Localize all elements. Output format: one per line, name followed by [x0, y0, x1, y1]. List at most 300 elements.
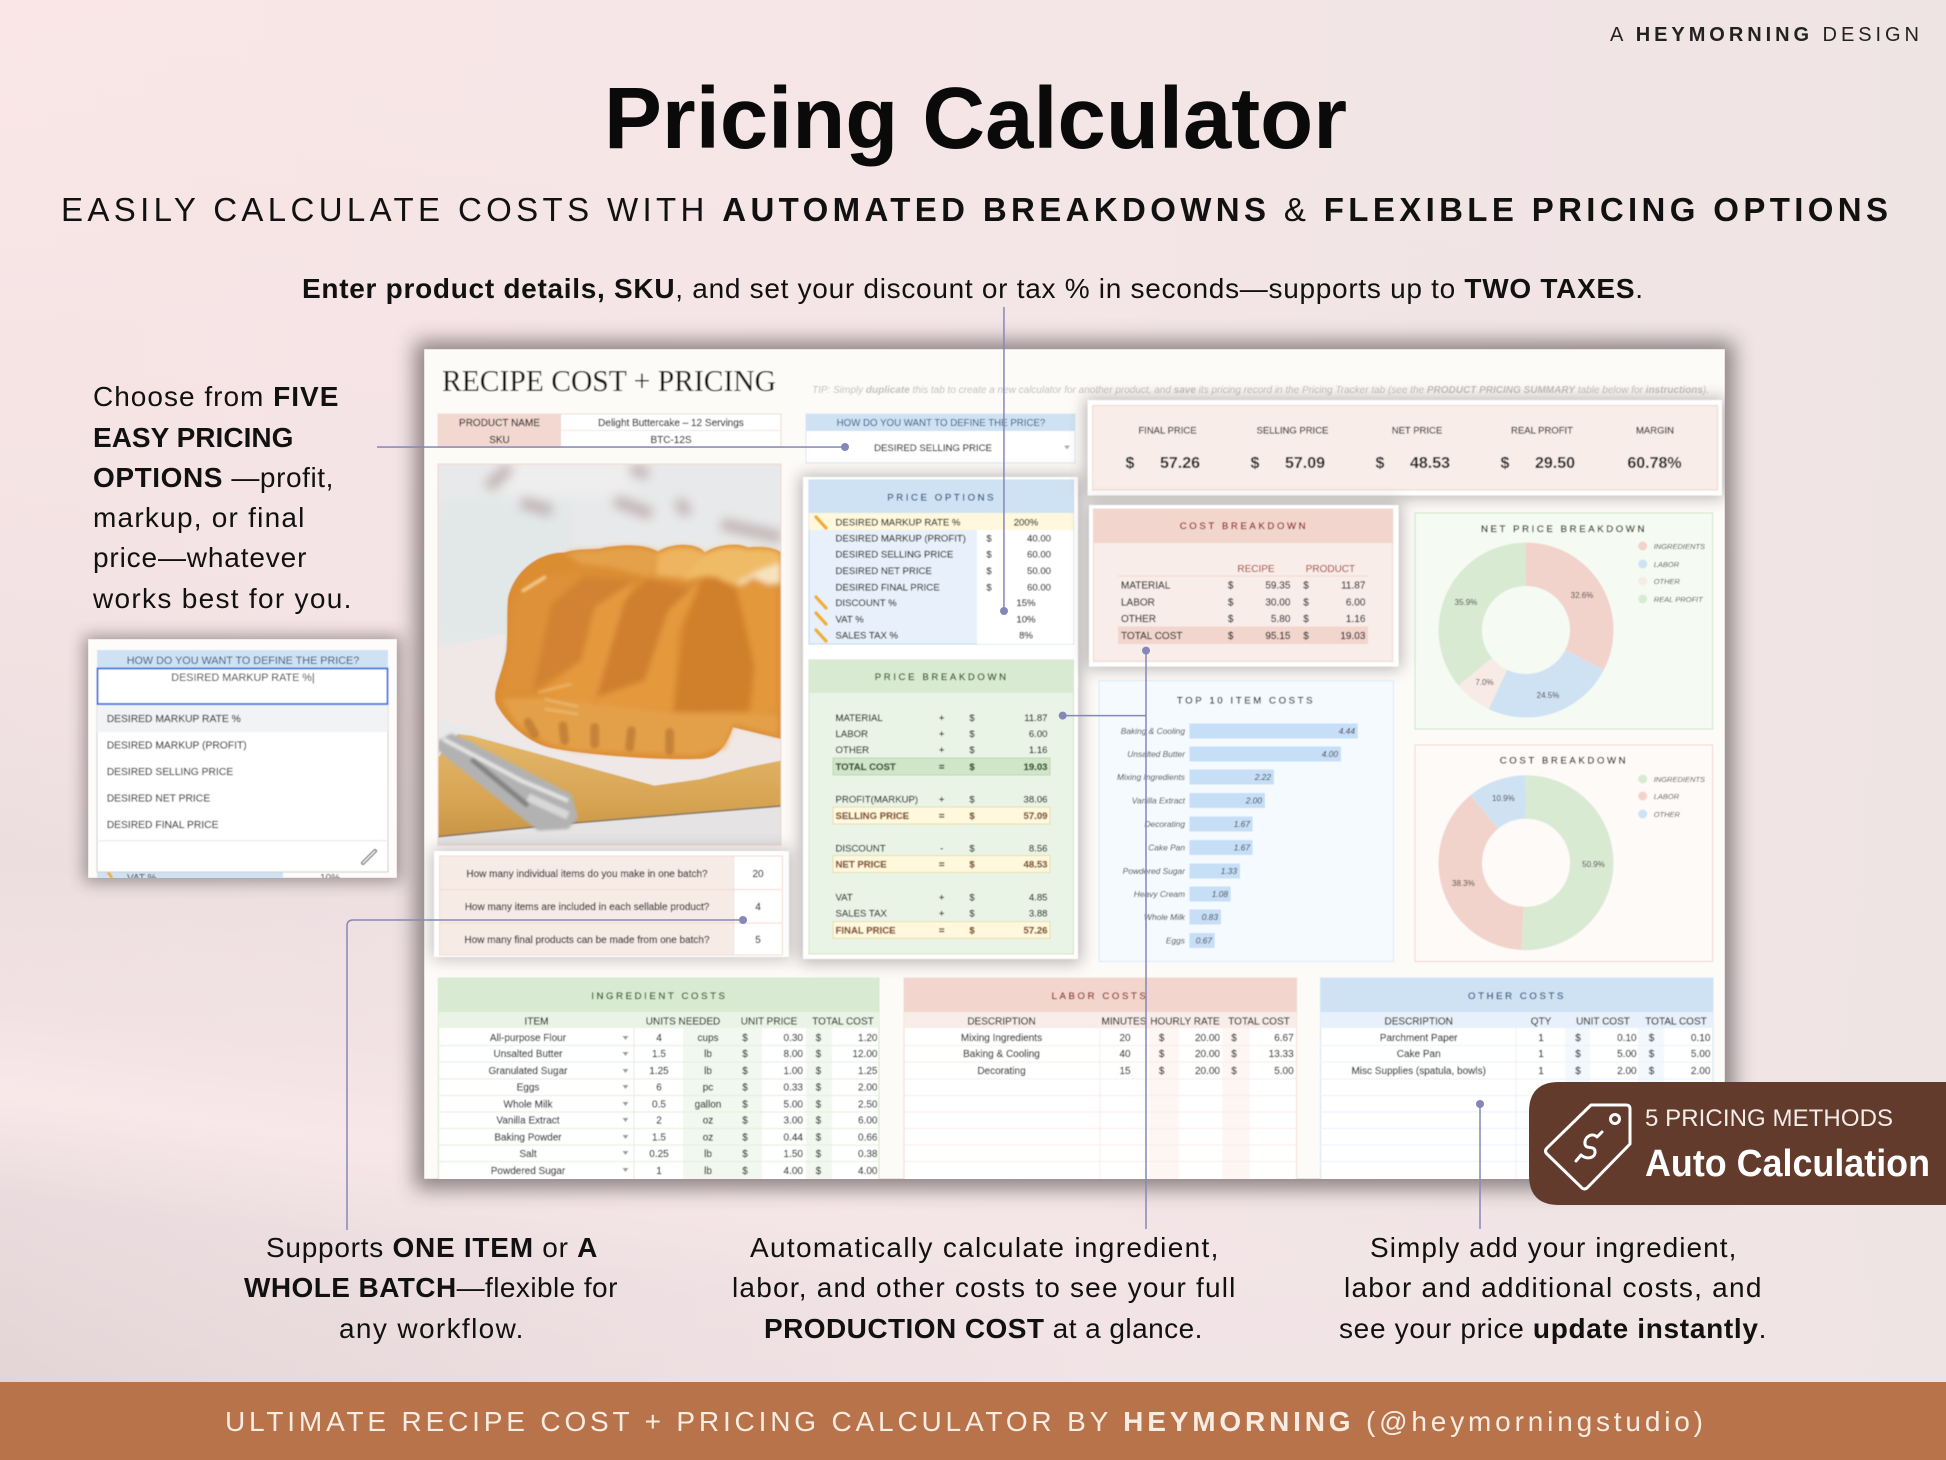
- panel: cost breakdown table: LABOR: [1121, 598, 1155, 608]
- panel: ingredient costs: lb: [704, 1049, 712, 1060]
- panel: price summary strip: [1088, 400, 1722, 496]
- legend: cost: INGREDIENTS: [1654, 775, 1705, 784]
- panel: other costs: $: [1649, 1049, 1655, 1060]
- panel: price breakdown: 1.16: [1029, 745, 1048, 756]
- panel: cost donut: 10.9%: [1492, 794, 1515, 803]
- panel: ingredient costs: 1.25: [858, 1066, 878, 1077]
- panel: price summary strip: SELLING PRICE: [1257, 426, 1328, 436]
- panel: price breakdown: $: [969, 860, 975, 870]
- panel: net price donut: 32.6%: [1571, 591, 1593, 600]
- panel: other costs: 2.00: [1691, 1066, 1711, 1077]
- panel: ingredient costs: TOTAL COST: [812, 1016, 874, 1028]
- panel: other costs: TOTAL COST: [1645, 1016, 1707, 1028]
- panel: ingredient costs: oz: [703, 1116, 713, 1126]
- panel: labor costs: 15: [1119, 1066, 1131, 1077]
- panel: price options: 200%: [1014, 518, 1039, 528]
- panel: ingredient costs: $: [742, 1049, 748, 1060]
- panel: labor costs: Mixing Ingredients: [961, 1033, 1042, 1044]
- bar chart: Heavy Cream: [1134, 889, 1185, 899]
- text block: five pricing options: [92, 381, 352, 614]
- text block: five pricing options: markup, or final: [93, 502, 305, 533]
- panel: price breakdown: 57.26: [1023, 926, 1048, 936]
- bar chart: Powdered Sugar: [1123, 866, 1186, 876]
- panel: dropdown screenshot: DESIRED MARKUP (PROFIT): [107, 741, 247, 752]
- panel: price breakdown: 6.00: [1029, 729, 1048, 740]
- panel: dropdown screenshot: [88, 639, 397, 884]
- panel: price options: DESIRED SELLING PRICE: [836, 550, 953, 560]
- connector: batch questions to caption: [347, 916, 747, 1230]
- panel: ingredient costs: $: [816, 1033, 822, 1044]
- panel: other costs: QTY: [1531, 1016, 1552, 1028]
- panel: ingredient costs: Powdered Sugar: [491, 1166, 566, 1177]
- panel: other costs: $: [1649, 1033, 1655, 1044]
- panel: labor costs: 20.00: [1195, 1033, 1220, 1044]
- dropdown shadow: [84, 636, 401, 882]
- panel: cost donut: 38.3%: [1452, 879, 1475, 888]
- batch questions table: 4: [755, 902, 761, 913]
- panel: price breakdown: VAT: [836, 892, 853, 904]
- panel: labor costs: 5.00: [1274, 1066, 1294, 1077]
- panel: other costs: [1320, 978, 1713, 1188]
- panel: other costs: Misc Supplies (spatula, bowls): [1351, 1066, 1486, 1077]
- panel: labor costs: 13.33: [1269, 1049, 1294, 1060]
- panel: other costs: 5.00: [1617, 1049, 1637, 1060]
- panel: price options: 60.00: [1027, 582, 1051, 594]
- panel: price options: 60.00: [1027, 550, 1051, 560]
- panel: price summary strip: FINAL PRICE: [1138, 426, 1197, 436]
- bar chart: 1.33: [1221, 866, 1237, 876]
- text block: five pricing options: Choose from FIVE: [93, 381, 339, 412]
- panel: price breakdown: $: [969, 926, 975, 936]
- bar chart: Eggs: [1166, 936, 1186, 946]
- panel: net price donut: 24.5%: [1537, 691, 1559, 700]
- panel: cost breakdown table: 5.80: [1271, 614, 1291, 625]
- connector: breakdown to caption: [1059, 647, 1150, 1229]
- panel: price summary strip: 57.26: [1160, 455, 1200, 472]
- icons: pencils: [816, 517, 826, 641]
- caption: batch support: any workflow.: [339, 1313, 524, 1344]
- badge: auto calculation: Auto Calculation: [1645, 1143, 1930, 1185]
- icon: pencil: [363, 851, 375, 863]
- panel: ingredient costs: Whole Milk: [504, 1100, 553, 1110]
- connector: tax sentence to tax rows: [1000, 307, 1008, 615]
- panel: other costs: 1: [1538, 1033, 1544, 1044]
- panel: cost breakdown table: $: [1228, 631, 1234, 642]
- legend: cost: OTHER: [1654, 810, 1681, 819]
- shadow: summary strip: [1085, 398, 1725, 498]
- caption: batch support: WHOLE BATCH—flexible for: [244, 1272, 618, 1303]
- bar chart: Decorating: [1144, 819, 1185, 829]
- panel: labor costs: DESCRIPTION: [967, 1016, 1036, 1028]
- panel: price summary strip: 48.53: [1410, 455, 1450, 472]
- panel: price breakdown: =: [939, 926, 945, 936]
- cake photo: [438, 464, 781, 845]
- panel: other costs: $: [1575, 1033, 1581, 1044]
- panel: other costs: 1: [1538, 1049, 1544, 1060]
- panel: ingredient costs: Vanilla Extract: [496, 1116, 560, 1126]
- panel: cost breakdown table: 59.35: [1265, 580, 1291, 592]
- panel: price summary strip: 60.78%: [1627, 455, 1682, 472]
- panel: ingredient costs: 1: [656, 1166, 662, 1177]
- panel: cost breakdown table: $: [1228, 580, 1234, 592]
- panel: ingredient costs: 0.30: [784, 1033, 803, 1044]
- bar chart: Whole Milk: [1144, 912, 1186, 922]
- panel: labor costs: TOTAL COST: [1228, 1016, 1290, 1028]
- badge: auto calculation: 5 PRICING METHODS: [1645, 1105, 1893, 1132]
- panel: price options: $: [986, 550, 992, 560]
- panel: cost breakdown table: TOTAL COST: [1121, 631, 1182, 642]
- product name table: BTC-12S: [650, 435, 692, 446]
- panel: other costs: OTHER COSTS: [1468, 991, 1566, 1002]
- panel: labor costs: 20.00: [1195, 1066, 1220, 1077]
- panel: price breakdown: +: [939, 713, 945, 724]
- panel: ingredient costs: $: [816, 1166, 822, 1177]
- panel: other costs: 1: [1538, 1066, 1544, 1077]
- footer bar: [0, 1382, 1946, 1460]
- panel: price options: $: [986, 582, 992, 594]
- caption: instant update: labor and additional costs, and: [1344, 1272, 1762, 1303]
- panel: cost breakdown table: 6.00: [1346, 598, 1366, 608]
- panel: dropdown screenshot: DESIRED FINAL PRICE: [107, 820, 219, 831]
- panel: cost breakdown table: 1.16: [1346, 614, 1366, 625]
- panel: ingredient costs: ITEM: [525, 1016, 548, 1028]
- title: Pricing Calculator: [604, 70, 1347, 167]
- panel: other costs: $: [1649, 1066, 1655, 1077]
- panel: price breakdown: +: [939, 729, 945, 740]
- panel: cost breakdown table: $: [1228, 614, 1234, 625]
- bar chart: 4.00: [1322, 749, 1338, 759]
- panel: price summary strip: 29.50: [1535, 455, 1575, 472]
- panel: price breakdown: $: [969, 811, 975, 822]
- panel: ingredient costs: INGREDIENT COSTS: [591, 991, 728, 1002]
- panel: labor costs: $: [1159, 1049, 1165, 1060]
- bar chart: Cake Pan: [1148, 842, 1185, 852]
- panel: cost breakdown table: 30.00: [1265, 598, 1291, 608]
- panel: ingredient costs: 4: [656, 1033, 662, 1044]
- bar chart: 0.67: [1196, 936, 1212, 946]
- panel: ingredient costs: 1.25: [649, 1066, 669, 1077]
- caption: batch support: [244, 1232, 618, 1344]
- bar chart: Unsalted Butter: [1127, 749, 1186, 759]
- panel: ingredient costs: [438, 978, 879, 1188]
- panel: price breakdown: 3.88: [1029, 908, 1048, 920]
- panel: ingredient costs: UNITS NEEDED: [646, 1016, 720, 1028]
- product name table: [438, 414, 781, 447]
- panel: price breakdown: SELLING PRICE: [836, 811, 910, 822]
- panel: cost breakdown table: 19.03: [1340, 631, 1366, 642]
- text block: five pricing options: OPTIONS —profit,: [93, 462, 334, 493]
- panel: ingredient costs: $: [742, 1116, 748, 1126]
- text block: five pricing options: EASY PRICING: [93, 422, 294, 453]
- badge: auto calculation: [1529, 1082, 1946, 1205]
- panel: ingredient costs: 2.00: [858, 1082, 878, 1094]
- panel: other costs: 2.00: [1617, 1066, 1637, 1077]
- panel: price options: PRICE OPTIONS: [887, 492, 996, 504]
- panel: dropdown screenshot: HOW DO YOU WANT TO DEFINE THE PRICE?: [127, 655, 359, 667]
- panel: price summary strip: $: [1251, 455, 1260, 472]
- panel: ingredient costs: 0.25: [649, 1149, 669, 1160]
- panel: net price donut: 35.9%: [1455, 598, 1477, 607]
- donut chart: cost: [1460, 797, 1592, 928]
- panel: cost breakdown table: RECIPE: [1237, 564, 1275, 575]
- panel: price breakdown: [809, 660, 1074, 954]
- panel: ingredient costs: 2: [656, 1116, 662, 1126]
- panel: cost breakdown table: MATERIAL: [1121, 580, 1171, 592]
- donut chart: net price: [1460, 564, 1592, 696]
- panel: price options: DESIRED FINAL PRICE: [836, 582, 940, 594]
- panel: dropdown screenshot: DESIRED SELLING PRICE: [107, 767, 233, 778]
- panel: ingredient costs: 0.38: [858, 1149, 878, 1160]
- panel: ingredient costs: 5.00: [784, 1100, 803, 1110]
- panel: ingredient costs: 12.00: [852, 1049, 878, 1060]
- bar chart: 4.44: [1339, 726, 1355, 736]
- caption: production cost: PRODUCTION COST at a glance.: [764, 1313, 1203, 1344]
- panel: cost breakdown table: $: [1228, 598, 1234, 608]
- knife: [438, 733, 578, 831]
- panel: price breakdown: -: [940, 844, 943, 854]
- caption: production cost: [732, 1232, 1236, 1344]
- panel: ingredient costs: 1.50: [784, 1149, 803, 1160]
- panel: labor costs: [904, 978, 1297, 1188]
- panel: ingredient costs: lb: [704, 1066, 712, 1077]
- panel: price breakdown: SALES TAX: [836, 908, 887, 920]
- legend: net price: INGREDIENTS: [1654, 542, 1705, 551]
- panel: price breakdown: 19.03: [1023, 762, 1048, 773]
- batch questions table: [432, 849, 791, 959]
- panel: labor costs: $: [1231, 1066, 1237, 1077]
- panel: price breakdown: LABOR: [836, 729, 868, 740]
- panel: ingredient costs: Unsalted Butter: [494, 1049, 563, 1060]
- panel: price options: SALES TAX %: [836, 630, 899, 642]
- panel: price breakdown: $: [969, 908, 975, 920]
- panel: ingredient costs: $: [742, 1149, 748, 1160]
- panel: ingredient costs: $: [816, 1116, 822, 1126]
- panel: price options: DISCOUNT %: [836, 598, 897, 609]
- panel: price options: [809, 480, 1074, 644]
- panel: price breakdown: 11.87: [1024, 713, 1048, 724]
- sheet heading: RECIPE COST + PRICING: [442, 363, 776, 398]
- panel: ingredient costs: pc: [703, 1082, 713, 1094]
- panel: dropdown screenshot: VAT %: [127, 873, 157, 884]
- panel: labor costs: Baking & Cooling: [963, 1049, 1040, 1060]
- panel: net price donut: 7.0%: [1475, 678, 1494, 687]
- connector: pricing options to selector: [377, 443, 849, 451]
- panel: price breakdown: =: [939, 811, 945, 822]
- panel: price breakdown: $: [969, 892, 975, 904]
- legend: cost: LABOR: [1654, 792, 1680, 801]
- panel: price summary strip: $: [1376, 455, 1385, 472]
- shadow: cost card: [1087, 503, 1401, 669]
- panel: ingredient costs: Salt: [519, 1149, 537, 1160]
- panel: price options: 50.00: [1027, 566, 1051, 577]
- panel: price options: $: [986, 534, 992, 544]
- panel: ingredient costs: oz: [703, 1132, 713, 1144]
- panel: cost donut: [1415, 745, 1713, 962]
- panel: other costs: DESCRIPTION: [1385, 1016, 1453, 1028]
- panel: ingredient costs: 1.20: [858, 1033, 878, 1044]
- panel: price breakdown: =: [939, 762, 945, 773]
- panel: other costs: Parchment Paper: [1380, 1033, 1458, 1044]
- footer bar: ULTIMATE RECIPE COST + PRICING CALCULATOR BY HEYMORNING (@heymorningstudio): [225, 1406, 1703, 1437]
- caption: instant update: see your price update instantly.: [1339, 1313, 1767, 1344]
- bar chart: 1.08: [1212, 889, 1228, 899]
- panel: price breakdown: =: [939, 860, 945, 870]
- panel: other costs: 0.10: [1617, 1033, 1637, 1044]
- panel: price breakdown: OTHER: [836, 745, 869, 756]
- panel: ingredient costs: Eggs: [517, 1082, 539, 1094]
- tip text: TIP: Simply duplicate this tab to create a new calculator for another product, and save its pricing record in the Pricing Tracker tab (see the PRODUCT PRICING SUMMARY table below for instructions).: [812, 385, 1709, 396]
- panel: ingredient costs: cups: [697, 1033, 719, 1044]
- panel: price options: 40.00: [1027, 534, 1051, 544]
- panel: price breakdown: PROFIT(MARKUP): [836, 794, 918, 806]
- bar chart: 1.67: [1234, 819, 1250, 829]
- legend: net price: LABOR: [1654, 560, 1680, 569]
- panel: top 10 item costs: [1099, 681, 1394, 962]
- panel: ingredient costs: lb: [704, 1149, 712, 1160]
- panel: price summary strip: $: [1126, 455, 1135, 472]
- panel: price breakdown: $: [969, 729, 975, 740]
- panel: cost breakdown table: 95.15: [1265, 631, 1291, 642]
- product name table: SKU: [489, 435, 510, 446]
- connector: other costs to caption: [1476, 1100, 1484, 1229]
- panel: price breakdown: DISCOUNT: [836, 844, 886, 854]
- panel: other costs: 5.00: [1691, 1049, 1711, 1060]
- caption: batch support: Supports ONE ITEM or A: [266, 1232, 598, 1263]
- bar chart: Baking & Cooling: [1121, 726, 1185, 736]
- panel: price breakdown: $: [969, 762, 975, 773]
- panel: price options: VAT %: [836, 614, 864, 626]
- sheet drop shadow: [415, 341, 1734, 1189]
- panel: price breakdown: 48.53: [1023, 860, 1048, 870]
- panel: ingredient costs: lb: [704, 1166, 712, 1177]
- panel: labor costs: 20: [1119, 1033, 1131, 1044]
- panel: price breakdown: +: [939, 892, 945, 904]
- panel: ingredient costs: 3.00: [784, 1116, 803, 1126]
- legend: net price: OTHER: [1654, 577, 1681, 586]
- panel: other costs: $: [1575, 1066, 1581, 1077]
- panel: ingredient costs: $: [816, 1149, 822, 1160]
- panel: price options: 8%: [1019, 630, 1033, 642]
- panel: price breakdown: +: [939, 908, 945, 920]
- panel: cost breakdown table: $: [1303, 631, 1309, 642]
- panel: cost breakdown table: $: [1303, 598, 1309, 608]
- panel: price options: DESIRED NET PRICE: [836, 566, 932, 577]
- panel: ingredient costs: 8.00: [784, 1049, 803, 1060]
- price definition selector: DESIRED SELLING PRICE: [874, 443, 992, 454]
- panel: labor costs: 6.67: [1274, 1033, 1294, 1044]
- panel: price summary strip: REAL PROFIT: [1511, 426, 1573, 436]
- text block: five pricing options: works best for you.: [92, 583, 352, 614]
- panel: labor costs: $: [1159, 1066, 1165, 1077]
- panel: other costs: UNIT COST: [1576, 1016, 1630, 1028]
- panel: labor costs: LABOR COSTS: [1052, 991, 1148, 1002]
- panel: ingredient costs: 6.00: [858, 1116, 878, 1126]
- panel: price breakdown: +: [939, 745, 945, 756]
- panel: price breakdown: $: [969, 844, 975, 854]
- panel: ingredient costs: 2.50: [858, 1100, 878, 1110]
- panel: cost breakdown table: COST BREAKDOWN: [1180, 521, 1308, 532]
- price definition selector: HOW DO YOU WANT TO DEFINE THE PRICE?: [837, 418, 1046, 429]
- panel: price options: DESIRED MARKUP RATE %: [836, 518, 961, 528]
- panel: ingredient costs: $: [742, 1166, 748, 1177]
- panel: ingredient costs: 4.00: [858, 1166, 878, 1177]
- panel: other costs: Cake Pan: [1397, 1049, 1441, 1060]
- caption: instant update: [1339, 1232, 1767, 1344]
- panel: price breakdown: MATERIAL: [836, 713, 883, 724]
- panel: labor costs: 40: [1119, 1049, 1131, 1060]
- panel: labor costs: $: [1231, 1049, 1237, 1060]
- product name table: Delight Buttercake – 12 Servings: [598, 418, 744, 429]
- panel: price summary strip: MARGIN: [1636, 426, 1674, 436]
- panel: ingredient costs: $: [742, 1100, 748, 1110]
- panel: cost breakdown table: $: [1303, 580, 1309, 592]
- panel: ingredient costs: 0.33: [784, 1082, 803, 1094]
- panel: ingredient costs: Baking Powder: [494, 1132, 562, 1144]
- panel: price summary strip: $: [1501, 455, 1510, 472]
- panel: labor costs: 20.00: [1195, 1049, 1220, 1060]
- panel: cost donut: 50.9%: [1582, 860, 1605, 869]
- bar chart: 0.83: [1202, 912, 1218, 922]
- panel: ingredient costs: $: [816, 1082, 822, 1094]
- batch questions table: How many individual items do you make in one batch?: [466, 869, 708, 880]
- panel: price breakdown: PRICE BREAKDOWN: [875, 672, 1009, 683]
- panel: ingredient costs: $: [742, 1082, 748, 1094]
- panel: cost breakdown table: OTHER: [1121, 614, 1156, 625]
- panel: price options: 10%: [1016, 614, 1036, 626]
- panel: ingredient costs: $: [742, 1132, 748, 1144]
- panel: ingredient costs: $: [816, 1100, 822, 1110]
- bar chart: 2.00: [1245, 796, 1262, 806]
- panel: spreadsheet screenshot: [424, 349, 1725, 1188]
- caption: instant update: Simply add your ingredient,: [1370, 1232, 1737, 1263]
- panel: other costs: 0.10: [1691, 1033, 1711, 1044]
- legend: net price: [1638, 542, 1705, 604]
- intro sentence: Enter product details, SKU, and set your discount or tax % in seconds—supports up to TWO TAXES.: [302, 273, 1643, 304]
- panel: price breakdown: FINAL PRICE: [836, 926, 896, 936]
- panel: ingredient costs: 1.00: [784, 1066, 803, 1077]
- center column card: [803, 477, 1078, 959]
- panel: ingredient costs: gallon: [695, 1100, 721, 1110]
- panel: ingredient costs: 1.5: [652, 1049, 666, 1060]
- panel: dropdown screenshot: DESIRED MARKUP RATE %|: [171, 672, 315, 684]
- panel: cost breakdown table: 11.87: [1341, 580, 1366, 592]
- panel: cost donut: COST BREAKDOWN: [1500, 756, 1628, 766]
- panel: ingredient costs: $: [816, 1066, 822, 1077]
- panel: cost breakdown table: $: [1303, 614, 1309, 625]
- panel: ingredient costs: $: [816, 1049, 822, 1060]
- panel: labor costs: Decorating: [977, 1066, 1026, 1077]
- bar chart: 1.67: [1234, 842, 1250, 852]
- panel: price breakdown: $: [969, 713, 975, 724]
- icon: price tag: [1546, 1105, 1630, 1189]
- panel: ingredient costs: 0.5: [652, 1100, 666, 1110]
- bar chart: 2.22: [1254, 772, 1271, 782]
- panel: price summary strip: 57.09: [1285, 455, 1325, 472]
- bar chart: [1117, 724, 1358, 948]
- marble veins: [488, 467, 781, 537]
- panel: ingredient costs: 0.44: [784, 1132, 803, 1144]
- panel: ingredient costs: All-purpose Flour: [490, 1033, 567, 1044]
- panel: other costs: $: [1575, 1049, 1581, 1060]
- price definition selector: [806, 414, 1075, 463]
- panel: labor costs: MINUTES: [1102, 1016, 1147, 1028]
- batch questions table: 5: [755, 935, 761, 946]
- panel: price options: DESIRED MARKUP (PROFIT): [836, 534, 966, 544]
- panel: labor costs: $: [1231, 1033, 1237, 1044]
- panel: price breakdown: $: [969, 794, 975, 806]
- panel: dropdown screenshot: 10%: [320, 873, 340, 884]
- panel: dropdown screenshot: DESIRED NET PRICE: [107, 793, 210, 804]
